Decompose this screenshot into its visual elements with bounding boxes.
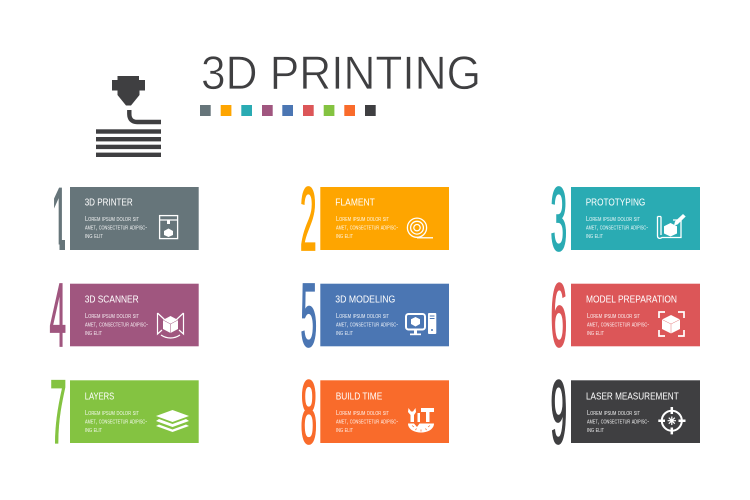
panel: layers: 7 [50,362,67,463]
panel: build time: 8 [300,362,317,463]
panel: 3D scanner: Lorem ipsum dolor sit [85,313,139,320]
panel: model preparation [550,265,700,366]
panel: 3D scanner: 3D SCANNER [85,295,139,306]
panel: 3D modeling [300,265,449,366]
icon: computer [406,313,436,335]
panel: filament: 2 [300,169,317,270]
panel: model preparation: Lorem ipsum dolor sit [587,313,640,320]
icon: cube in frame [659,312,684,336]
panel: 3D modeling: Lorem ipsum dolor sit [336,313,389,320]
panel: build time: Lorem ipsum dolor sit [336,410,389,417]
panel: build time [300,362,449,463]
panel: prototyping: 3 [550,169,567,270]
panel: laser measurement: LASER MEASUREMENT [586,391,679,402]
panel: model preparation: ing elit [587,330,604,337]
panel: 3D modeling: ing elit [336,330,353,337]
panel: filament: ing elit [336,233,353,240]
icon: stacked layers [156,410,189,432]
panel: layers [50,362,199,463]
panel: 3D printer: amet, consectetur adipisc- [85,224,148,232]
panel: laser measurement: Lorem ipsum dolor sit [587,410,640,417]
icon: 3D printer head and layers [96,76,161,157]
panel: laser measurement: ing elit [587,427,604,434]
panel: layers: amet, consectetur adipisc- [85,418,148,426]
panel: 3D printer: Lorem ipsum dolor sit [85,216,139,223]
icon: tools and clock [408,408,434,432]
panel: 3D printer [48,168,199,273]
panel: filament: FLAMENT [335,198,375,208]
panel: prototyping [550,169,700,270]
panel: filament [300,169,449,270]
panel: 3D printer: 3D PRINTER [85,198,133,208]
icon: printer [160,216,178,239]
panel: build time: BUILD TIME [336,391,383,402]
panel: 3D scanner: amet, consectetur adipisc- [85,322,149,328]
panel: 3D scanner: 4 [50,265,66,366]
colour key squares [200,105,376,116]
panel: 3D scanner [50,265,199,366]
panel: laser measurement: amet, consectetur adipisc- [587,418,650,426]
panel: 3D scanner: ing elit [85,330,102,337]
panel: model preparation: amet, consectetur adipisc- [587,322,650,328]
panel: 3D modeling: 5 [300,265,317,366]
panel: 3D printer: ing elit [85,233,103,240]
panel: prototyping: PROTOTYPING [586,198,645,208]
panel: 3D printer: 1 [52,168,68,273]
panel: prototyping: ing elit [586,233,603,240]
panel: layers: Lorem ipsum dolor sit [85,410,139,417]
icon: scanner [158,313,184,338]
panel: layers: LAYERS [85,391,115,402]
panel: model preparation: 6 [550,265,567,366]
panel: 3D modeling: amet, consectetur adipisc- [336,322,399,328]
icon: laser target [658,407,686,434]
panel: prototyping: Lorem ipsum dolor sit [586,216,640,223]
panel: build time: ing elit [336,427,353,434]
panel: model preparation: MODEL PREPARATION [586,295,677,306]
panel: laser measurement [550,362,700,463]
title: 3D PRINTING [201,46,481,99]
panel: laser measurement: 9 [550,362,567,463]
panel: filament: Lorem ipsum dolor sit [336,216,389,223]
panel: build time: amet, consectetur adipisc- [336,418,399,426]
panel: layers: ing elit [85,427,102,434]
icon: filament spool [407,218,433,238]
icon: blueprint with pencil [658,214,686,238]
panel: 3D modeling: 3D MODELING [335,295,395,306]
panel: prototyping: amet, consectetur adipisc- [586,224,649,232]
panel: filament: amet, consectetur adipisc- [336,224,399,232]
